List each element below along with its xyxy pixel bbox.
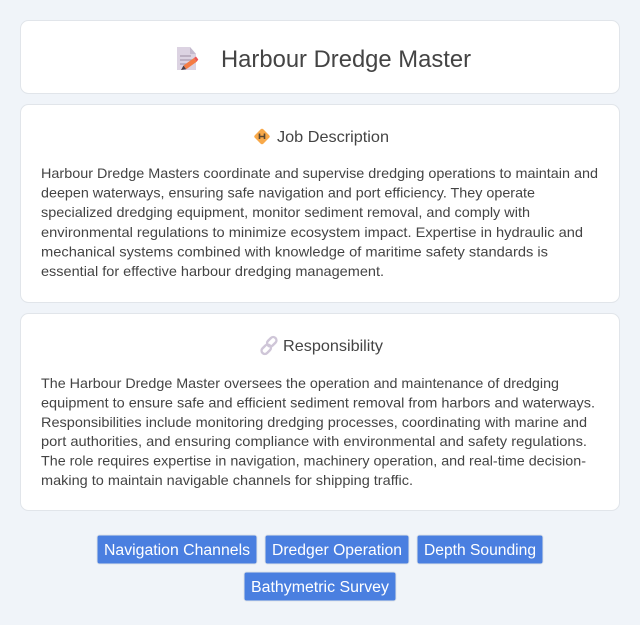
icon: chain link [260, 336, 278, 355]
job description text: environmental regulations to minimize ecosystem impact. Expertise in hydraulic and [41, 224, 583, 240]
job description text [41, 165, 598, 279]
heading: job description: Job Description [277, 129, 389, 146]
job description text: essential for effective harbour dredging management. [41, 263, 384, 279]
heading: responsibility: Responsibility [283, 338, 383, 355]
job description text: deepen waterways, ensuring safe navigation and port efficiency. They operate [41, 185, 535, 201]
responsibility text: Responsibilities include monitoring dredging processes, coordinating with marine and [41, 414, 587, 430]
panel: responsibility [20, 314, 620, 510]
tag: depth sounding [417, 535, 543, 564]
tag: bathymetric survey: Bathymetric Survey [251, 579, 389, 596]
responsibility text [41, 375, 595, 488]
icon: construction diamond [254, 128, 270, 145]
tag: navigation channels [97, 535, 257, 564]
responsibility text: The role requires expertise in navigation, machinery operation, and real-time decision- [41, 453, 586, 469]
icon: memo with pencil [177, 47, 198, 70]
job description text: Harbour Dredge Masters coordinate and supervise dredging operations to maintain and [41, 165, 598, 181]
tag: dredger operation [265, 535, 409, 564]
responsibility text: equipment to ensure safe and efficient sediment removal from harbors and waterways. [41, 394, 595, 410]
panel: title [20, 20, 620, 94]
tag: navigation channels: Navigation Channels [104, 542, 250, 559]
responsibility text: The Harbour Dredge Master oversees the operation and maintenance of dredging [41, 375, 559, 391]
tag: dredger operation: Dredger Operation [272, 542, 402, 559]
responsibility text: making to maintain navigable channels for shipping traffic. [41, 472, 413, 488]
tag: depth sounding: Depth Sounding [424, 542, 536, 559]
title text: Harbour Dredge Master [221, 46, 471, 73]
responsibility text: port authorities, and ensuring compliance with environmental and safety regulations. [41, 433, 587, 449]
job description text: specialized dredging equipment, monitor sediment removal, and comply with [41, 204, 530, 220]
tag: bathymetric survey [244, 572, 396, 601]
job description text: mechanical systems combined with knowledge of maritime safety standards is [41, 243, 548, 259]
panel: job description [20, 104, 620, 302]
